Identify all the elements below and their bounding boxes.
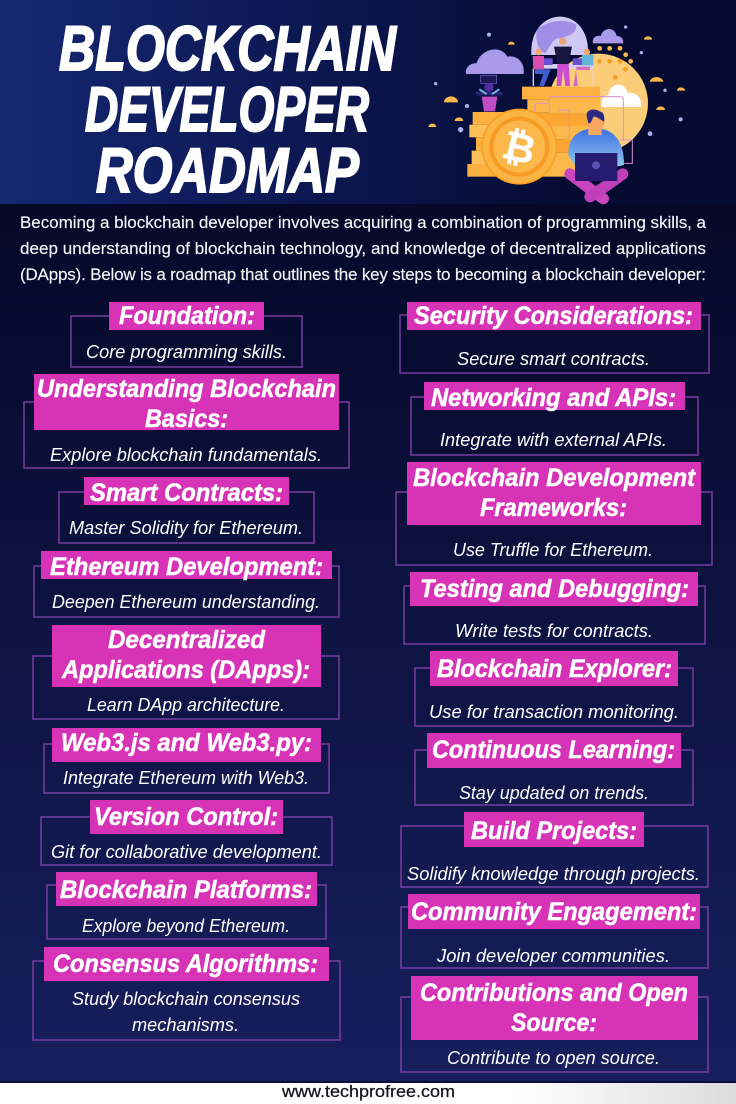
- card: Contributions and Open Source: [401, 976, 708, 1072]
- card: Blockchain Development Frameworks: Blockchain Development: [413, 464, 697, 492]
- intro text: Becoming a blockchain developer involves acquiring a combination of programming skills, a: [20, 213, 707, 232]
- card: Contributions and Open Source: Contribute to open source.: [447, 1047, 660, 1068]
- card: Security Considerations: [400, 302, 709, 373]
- card: Testing and Debugging: [404, 572, 705, 644]
- card: Community Engagement: Community Engagement:: [411, 898, 697, 926]
- card: Blockchain Platforms: Blockchain Platforms:: [60, 876, 312, 904]
- card: Consensus Algorithms: [33, 947, 340, 1040]
- title: [59, 14, 397, 206]
- card: Continuous Learning: Stay updated on trends.: [459, 782, 649, 803]
- card: Understanding Blockchain Basics: [24, 374, 349, 468]
- card: Understanding Blockchain Basics: Understanding Blockchain: [37, 375, 336, 403]
- card: Web3.js and Web3.py: [44, 728, 329, 793]
- card: Blockchain Platforms: Explore beyond Ethereum.: [82, 915, 290, 936]
- figure: man with laptop: [568, 110, 624, 199]
- figure: person under cloud: [476, 75, 503, 111]
- icon: white cloud: [601, 85, 641, 107]
- card: Security Considerations: Secure smart contracts.: [457, 348, 650, 369]
- card: Foundation: Foundation:: [119, 302, 255, 330]
- card: Build Projects: [401, 812, 708, 887]
- coin stack upper: [522, 87, 601, 177]
- card: Networking and APIs: Networking and APIs:: [431, 384, 676, 412]
- card: Continuous Learning: [415, 733, 693, 805]
- card: Testing and Debugging: Write tests for contracts.: [455, 620, 653, 641]
- card: Decentralized Applications: Decentralized: [108, 626, 266, 654]
- card: Community Engagement: Join developer communities.: [436, 945, 670, 966]
- card: Consensus Algorithms: Consensus Algorithms:: [53, 950, 318, 978]
- decorative coins and dots: [428, 36, 685, 127]
- card: Smart Contracts: [59, 477, 314, 543]
- intro text: (DApps). Below is a roadmap that outlines the key steps to becoming a blockchain developer:: [20, 265, 706, 284]
- coin stack lower: [467, 112, 531, 177]
- card: Build Projects: Solidify knowledge through projects.: [407, 863, 700, 884]
- card: Blockchain Explorer: Use for transaction monitoring.: [429, 701, 679, 722]
- card: Smart Contracts: Smart Contracts:: [90, 479, 283, 507]
- card: Build Projects: Build Projects:: [471, 817, 637, 845]
- card: Testing and Debugging: Testing and Debugging:: [420, 575, 689, 603]
- card: Decentralized Applications: Applications (DApps):: [61, 656, 310, 684]
- card: Blockchain Development Frameworks: Use Truffle for Ethereum.: [453, 539, 653, 560]
- title: BLOCKCHAIN: [59, 14, 397, 84]
- icon: right cloud: [593, 29, 623, 43]
- card: Web3.js and Web3.py: Web3.js and Web3.py:: [61, 729, 312, 757]
- card: Networking and APIs: Integrate with external APIs.: [440, 429, 667, 450]
- header banner: [0, 0, 736, 204]
- icon: left cloud: [466, 49, 524, 74]
- card: Understanding Blockchain Basics: Basics:: [145, 405, 228, 433]
- icon: yellow moon: [549, 54, 648, 153]
- card: Version Control: Git for collaborative development.: [51, 841, 322, 862]
- card: Continuous Learning: Continuous Learning:: [432, 736, 675, 764]
- card: Contributions and Open Source: Contributions and Open: [420, 979, 688, 1007]
- figure: three people at desk: [533, 38, 593, 86]
- icon: bitcoin coin: [481, 109, 557, 185]
- icon: globe: [531, 17, 588, 55]
- card: Security Considerations: Security Considerations:: [414, 302, 693, 330]
- footer bar: www.techprofree.com: [281, 1083, 455, 1101]
- card: Consensus Algorithms: Study blockchain consensus: [72, 988, 300, 1009]
- card: Contributions and Open Source: Source:: [511, 1009, 597, 1037]
- card: Blockchain Explorer: Blockchain Explorer:: [437, 655, 672, 683]
- body background: [0, 204, 736, 1082]
- card: Decentralized Applications: Learn DApp architecture.: [87, 694, 285, 715]
- footer bar: [0, 1081, 736, 1104]
- card: Understanding Blockchain Basics: Explore blockchain fundamentals.: [50, 444, 322, 465]
- card: Community Engagement: [401, 894, 708, 968]
- card: Networking and APIs: [411, 382, 698, 455]
- card: Decentralized Applications: [33, 625, 339, 719]
- circuit lines: [535, 97, 632, 163]
- card: Blockchain Development Frameworks: Frameworks:: [480, 494, 627, 522]
- card: Ethereum Development: Ethereum Development:: [50, 553, 323, 581]
- intro text: deep understanding of blockchain technology, and knowledge of decentralized applications: [20, 239, 706, 258]
- card: Version Control: [41, 800, 332, 865]
- illustration: bitcoin developers on coin stacks: [428, 17, 685, 199]
- card: Consensus Algorithms: mechanisms.: [132, 1014, 239, 1035]
- card: Ethereum Development: Deepen Ethereum understanding.: [52, 591, 320, 612]
- card: Version Control: Version Control:: [94, 803, 278, 831]
- card: Foundation: [71, 302, 302, 367]
- card: Web3.js and Web3.py: Integrate Ethereum with Web3.: [63, 767, 309, 788]
- card: Smart Contracts: Master Solidity for Ethereum.: [69, 517, 303, 538]
- card: Blockchain Platforms: [47, 872, 326, 939]
- title: ROADMAP: [96, 136, 360, 206]
- intro text: [20, 213, 707, 284]
- card: Foundation: Core programming skills.: [86, 341, 287, 362]
- icon: bitcoin coin: ₿: [498, 123, 540, 174]
- card: Ethereum Development: [34, 551, 339, 617]
- card: Blockchain Development Frameworks: [396, 462, 712, 565]
- title: DEVELOPER: [85, 75, 369, 145]
- card: Blockchain Explorer: [415, 651, 693, 726]
